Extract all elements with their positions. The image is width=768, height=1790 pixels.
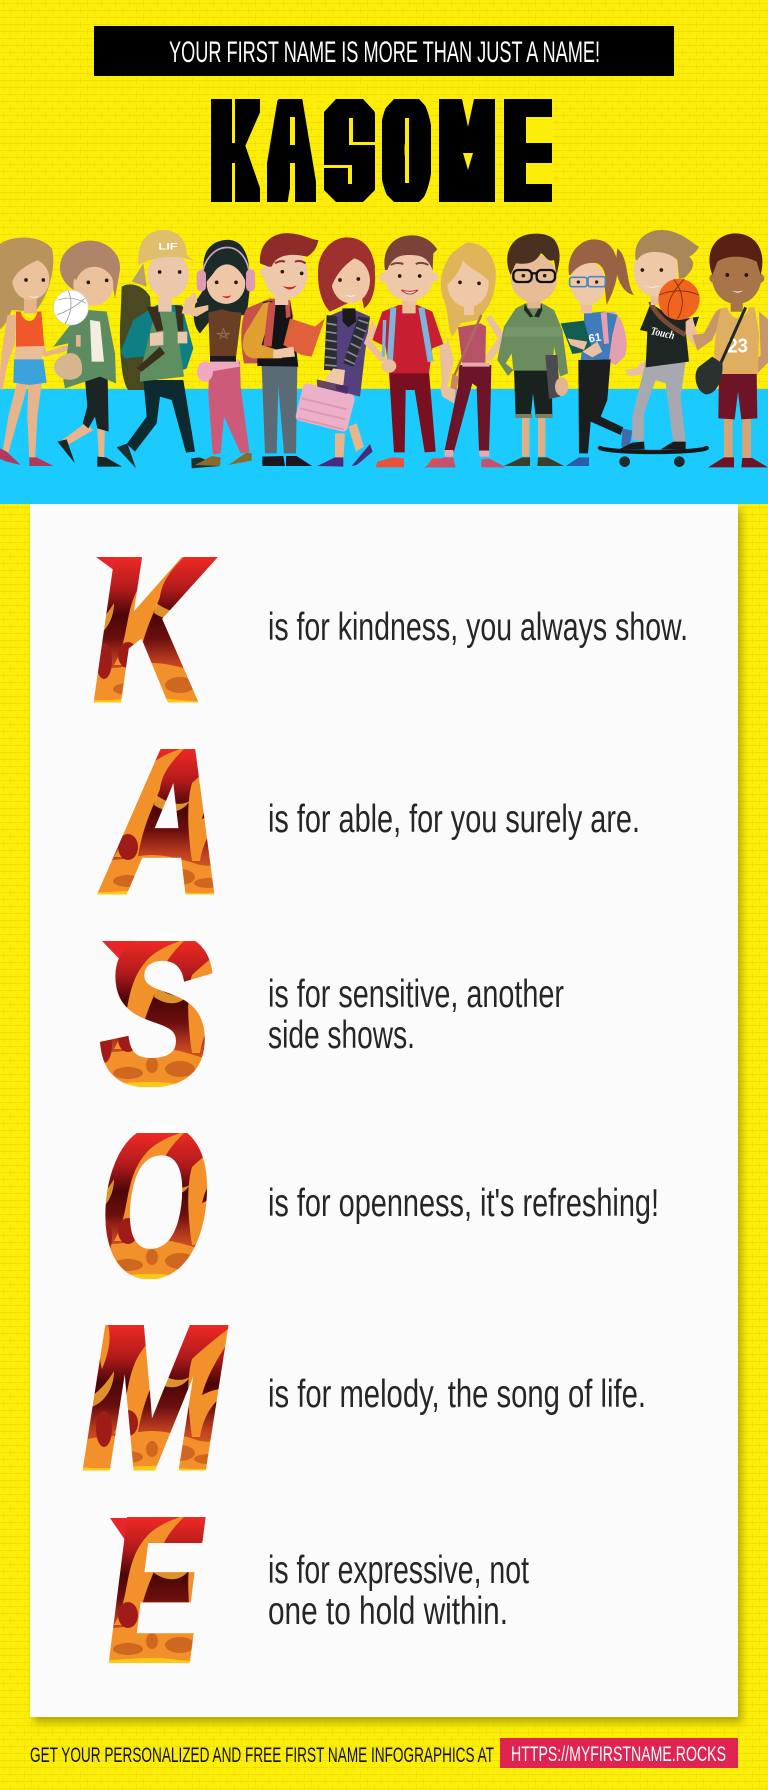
header banner bbox=[94, 26, 674, 76]
footer link badge bbox=[500, 1738, 738, 1768]
person 3: boy with backpack and cap bbox=[117, 230, 220, 468]
text M: is for melody, the song of life. bbox=[268, 1373, 646, 1416]
row M bbox=[83, 1279, 646, 1512]
person 9: boy with glasses bbox=[497, 234, 568, 466]
title: KASOME: A bbox=[271, 87, 309, 215]
person 10: girl with glasses and ponytail bbox=[561, 239, 634, 466]
person 7: boy in red shirt bbox=[364, 235, 455, 467]
person 4: girl with headphones bbox=[182, 240, 255, 466]
footer bbox=[30, 1738, 738, 1768]
title: KASOME: O bbox=[386, 87, 426, 215]
fire letter A: A bbox=[101, 703, 223, 936]
text A: is for able, for you surely are. bbox=[268, 798, 640, 841]
illustration: group of young people bbox=[0, 230, 768, 468]
footer text: GET YOUR PERSONALIZED AND FREE FIRST NAME INFOGRAPHICS AT bbox=[30, 1744, 494, 1767]
person 10: girl with glasses and ponytail: 61 bbox=[588, 332, 602, 345]
row E bbox=[109, 1472, 529, 1705]
row O bbox=[101, 1086, 659, 1319]
text E bbox=[268, 1549, 529, 1633]
person 8: blonde girl bbox=[424, 243, 507, 467]
blue floor band bbox=[0, 389, 768, 504]
main white panel bbox=[30, 504, 738, 1717]
fire letter M: M bbox=[83, 1279, 226, 1512]
text S bbox=[268, 973, 564, 1057]
row A bbox=[101, 703, 640, 936]
title: KASOME bbox=[211, 99, 553, 202]
row K bbox=[94, 511, 688, 744]
title: KASOME: S bbox=[328, 87, 370, 215]
title: KASOME: M bbox=[442, 87, 492, 215]
fire letter E: E bbox=[109, 1472, 204, 1705]
fire letter O: O bbox=[101, 1086, 207, 1319]
person 12: boy with tank top and bag bbox=[692, 233, 768, 467]
person 1: girl in orange top bbox=[0, 237, 77, 466]
people left half bbox=[0, 230, 375, 468]
person 5: boy with book bbox=[241, 233, 325, 466]
person 6: girl with pink bag bbox=[295, 237, 375, 467]
text E: one to hold within. bbox=[268, 1590, 508, 1633]
fire letter E bbox=[109, 1472, 204, 1705]
text S: side shows. bbox=[268, 1014, 415, 1057]
person 11: skater with basketball: Touch bbox=[650, 325, 676, 342]
title: KASOME: E bbox=[508, 87, 548, 215]
title: KASOME: K bbox=[214, 87, 250, 215]
panel shadow bbox=[34, 510, 742, 1723]
person 3: boy with backpack and cap: LIF bbox=[158, 241, 178, 251]
person 12: boy with tank top and bag: 23 bbox=[727, 334, 748, 357]
person 2: girl with volleyball bbox=[53, 241, 122, 467]
fire letter S: S bbox=[101, 894, 211, 1127]
fire letter K: K bbox=[94, 511, 216, 744]
person 11: skater with basketball bbox=[600, 230, 707, 467]
text E: is for expressive, not bbox=[268, 1549, 529, 1592]
row S bbox=[101, 894, 564, 1127]
people right half bbox=[364, 230, 768, 467]
text S: is for sensitive, another bbox=[268, 973, 564, 1016]
